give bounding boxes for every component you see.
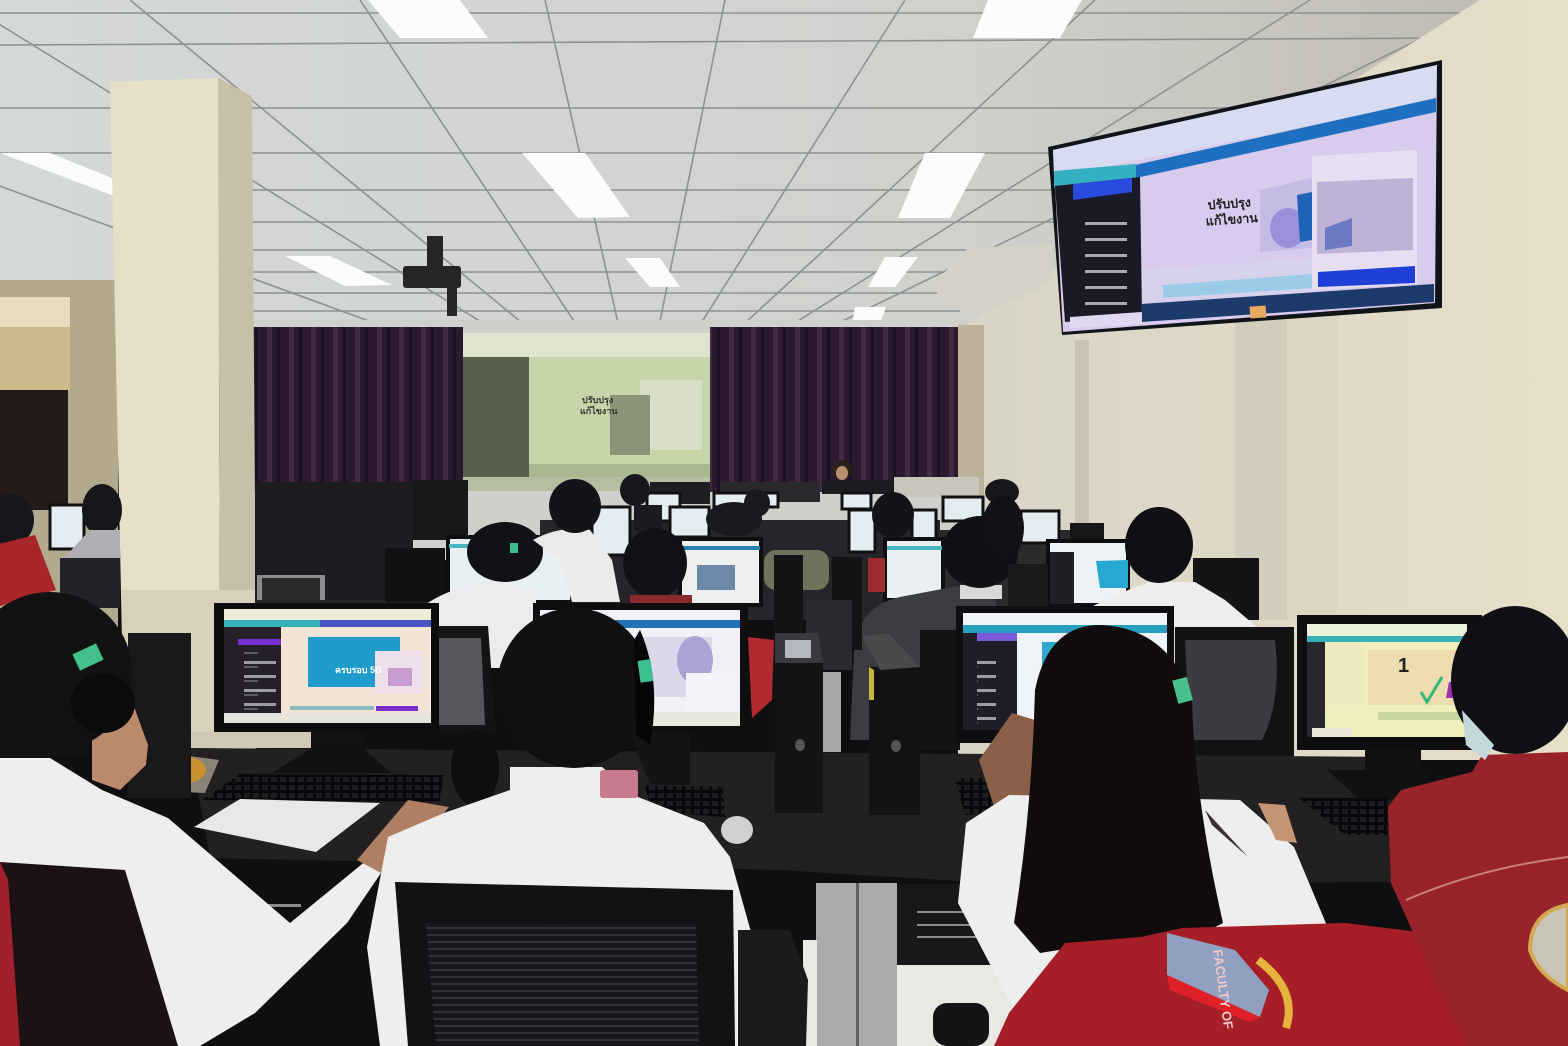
left wall and window <box>0 280 118 640</box>
front monitor 2 <box>533 603 748 785</box>
phone <box>600 770 638 798</box>
front monitor 3 <box>956 606 1174 743</box>
front desk <box>190 672 1400 1046</box>
face and raised hand <box>92 690 148 790</box>
woman with long hair <box>958 625 1330 1010</box>
chair behind student <box>0 862 178 1046</box>
helmet headset on desk <box>451 730 499 806</box>
computer towers <box>775 633 920 815</box>
chair right of monitor three <box>1175 627 1294 757</box>
projected heading: แก้ไขงาน <box>580 405 618 416</box>
center office chair <box>395 882 808 1046</box>
keyboards and mouse <box>202 774 1388 844</box>
jacket lettering: FACULTY OF <box>1210 948 1236 1030</box>
screen slide title: ครบรอบ 5G <box>335 665 382 675</box>
middle screen artwork <box>449 544 1128 604</box>
front left student <box>0 592 449 1046</box>
monitor stand <box>312 732 362 773</box>
ceiling <box>0 0 1568 420</box>
TV heading: ปรับปรุง <box>1207 195 1251 213</box>
empty office chairs behind front row <box>439 626 1294 757</box>
presenter <box>832 460 852 480</box>
TV heading: แก้ไขงาน <box>1205 210 1259 229</box>
ceiling lights <box>0 0 1082 324</box>
middle row monitors <box>448 537 1128 605</box>
distant monitors <box>50 493 1059 555</box>
projection screen <box>463 333 710 491</box>
chair right of monitor one <box>439 626 496 733</box>
front right student <box>1388 606 1568 1046</box>
projector <box>403 236 461 316</box>
right wall <box>958 0 1568 760</box>
quiz number: 1 <box>1398 655 1409 677</box>
left side students <box>0 484 122 608</box>
pillar <box>110 78 256 640</box>
front center student <box>367 608 758 1046</box>
red jacket on chair <box>933 923 1467 1046</box>
drawer strips <box>917 911 994 938</box>
back wall <box>250 320 970 560</box>
wall strip below pillar <box>122 590 256 750</box>
tower beside left student <box>128 633 191 798</box>
wall TV <box>1048 60 1442 335</box>
curtains <box>253 327 958 492</box>
front monitor 4 <box>1297 615 1482 800</box>
projected heading: ปรับปรุง <box>582 395 613 406</box>
backpack and towers mid-row <box>764 550 862 670</box>
monitor stand <box>1365 750 1421 784</box>
middle row students <box>416 474 1258 740</box>
notebook and snack box <box>140 752 380 852</box>
TV sidebar rows <box>1085 222 1127 305</box>
front monitor 1 <box>214 603 439 773</box>
air conditioner <box>932 244 1052 315</box>
hand <box>357 800 449 873</box>
back rows of desks <box>255 477 1259 640</box>
